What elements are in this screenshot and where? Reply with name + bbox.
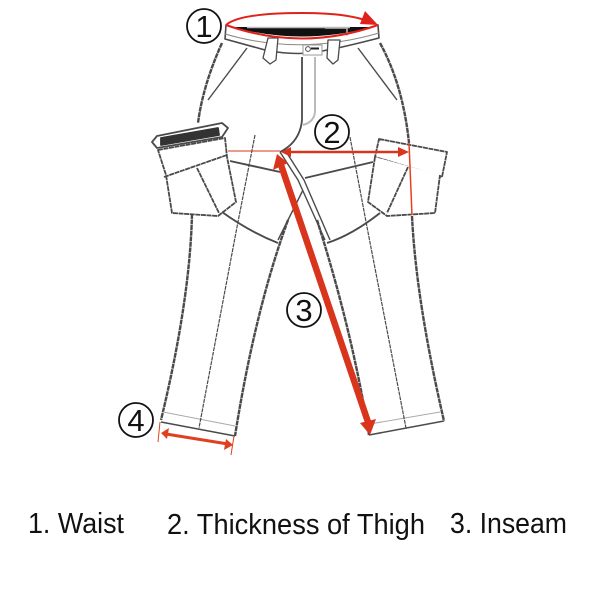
inseam measure arrow [273,154,376,435]
fly and button [280,45,322,152]
legend: waist: 1. Waist [28,508,124,540]
marker 2: 2 [323,115,341,150]
slash pockets [208,48,397,100]
marker 4: 4 [127,403,145,438]
trousers line drawing [152,25,447,436]
right leg [317,137,444,435]
right cargo pocket [368,139,447,216]
left leg [161,135,288,436]
side seams of the hips [198,43,409,143]
thigh measure arrow [228,143,412,215]
legend: inseam: 3. Inseam [450,508,567,540]
crotch inseam [278,150,330,240]
marker 3: 3 [295,293,313,328]
seat curves [222,161,380,243]
marker 1 [187,9,221,44]
legend: thickness of thigh: 2. Thickness of Thigh [167,509,425,541]
marker 4 [119,403,153,438]
marker 2 [315,115,349,150]
belt loops [263,38,340,64]
waist measure arrow [226,11,378,38]
hem measure arrow [158,422,234,455]
marker 3 [287,293,321,328]
waistband [225,25,379,54]
marker 1: 1 [195,9,213,44]
left cargo pocket [152,123,236,216]
